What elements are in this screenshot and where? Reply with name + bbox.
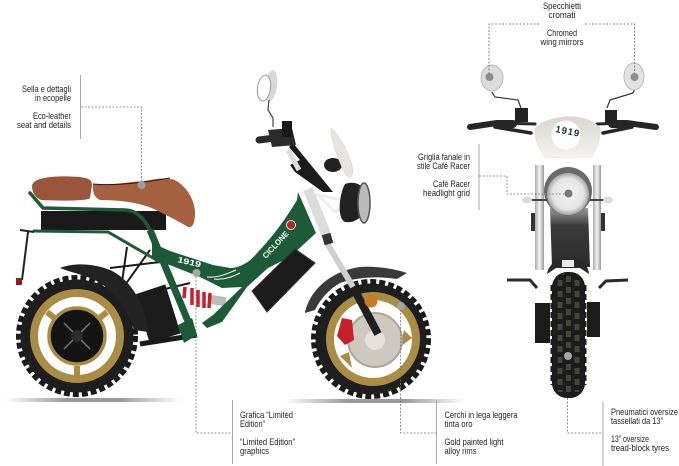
orange reflector: [364, 294, 378, 308]
frame brand text: CICLONE: [261, 229, 291, 260]
shock absorber: [184, 287, 226, 308]
rear wheel: [18, 278, 136, 394]
callout: limited edition graphics: “Limited Edition”: [240, 437, 295, 448]
mirrors and stems: [481, 63, 644, 123]
callout: oversize tyres: [564, 352, 678, 466]
rear mudguard: [60, 264, 148, 332]
callout: gold rims: tinta oro: [444, 419, 472, 430]
windshield: [331, 128, 353, 177]
red logo badge: [286, 220, 296, 230]
callout: chromed mirrors: Specchietti: [543, 1, 581, 12]
callout: oversize tyres: 13” oversize: [611, 434, 649, 445]
callout: headlight grid: Griglia fanale in: [418, 152, 470, 163]
side view motorcycle: [5, 69, 465, 403]
foot pegs: [507, 280, 628, 288]
callout: gold rims: [397, 302, 518, 464]
front wheel: [314, 282, 428, 396]
turn signals: [522, 196, 613, 204]
engine and lower parts: [535, 208, 600, 343]
seat stay tube: [150, 230, 190, 326]
front mudguard: [305, 267, 407, 313]
callout: chromed mirrors: [486, 1, 638, 81]
callout: headlight grid: [417, 144, 572, 210]
green frame: [150, 192, 316, 343]
front tyre: [552, 272, 585, 398]
rear light bracket: [16, 230, 34, 285]
battery box: [252, 249, 315, 312]
1919 badge: 1919: [554, 124, 580, 140]
callout: limited edition graphics: Edition”: [240, 419, 265, 430]
headlight: [544, 167, 592, 215]
pivot bracket: [178, 318, 197, 343]
handlebars: [470, 123, 656, 133]
ground shadows: [5, 398, 465, 403]
callout: gold rims: Gold painted light: [444, 437, 504, 448]
headlight bracket: [318, 195, 352, 212]
callout: eco-leather seat: in ecopelle: [35, 93, 71, 104]
fork tubes: [531, 165, 605, 270]
callout: oversize tyres: tassellati da 13”: [611, 416, 663, 427]
callout: headlight grid: headlight grid: [423, 188, 470, 199]
callout: gold rims: alloy rims: [444, 446, 477, 457]
callout: headlight grid: Café Racer: [433, 179, 470, 190]
1919 badge: [552, 120, 580, 150]
rear suspension and black frame: [110, 247, 197, 344]
steering head and black brace: [289, 143, 333, 192]
callout: chromed mirrors: cromati: [548, 10, 576, 21]
callout: chromed mirrors: Chromed: [547, 28, 577, 39]
callout: chromed mirrors: wing mirrors: [540, 37, 584, 48]
fairing: [535, 117, 600, 158]
upper fork tube: [288, 150, 299, 170]
headlight: [324, 158, 370, 223]
leather seat: [32, 176, 195, 227]
mudguard logo: [562, 260, 574, 267]
callout: gold rims: Cerchi in lega leggera: [444, 410, 518, 421]
callout: limited edition graphics: Grafica “Limited: [240, 410, 293, 421]
1919 frame graphic: 1919: [177, 255, 203, 270]
front mudguard: [547, 258, 589, 274]
callout: eco-leather seat: Eco-leather: [33, 111, 71, 122]
callout: eco-leather seat: Sella e dettagli: [22, 84, 71, 95]
brake caliper: [337, 318, 354, 345]
white swoosh: [207, 270, 240, 279]
side mirror: [256, 69, 279, 127]
callout: limited edition graphics: graphics: [240, 446, 269, 457]
seat rail and rear carrier: [30, 193, 160, 262]
front view motorcycle: [470, 63, 656, 398]
callout: limited edition graphics: [192, 269, 295, 464]
callout: eco-leather seat: seat and details: [17, 120, 71, 131]
callout: eco-leather seat: [17, 75, 146, 189]
front fork: [308, 189, 378, 334]
under-seat box: [41, 211, 166, 230]
callout: headlight grid: stile Café Racer: [417, 161, 470, 172]
brake disc: [348, 313, 402, 367]
handlebar grip and controls: [259, 121, 296, 147]
